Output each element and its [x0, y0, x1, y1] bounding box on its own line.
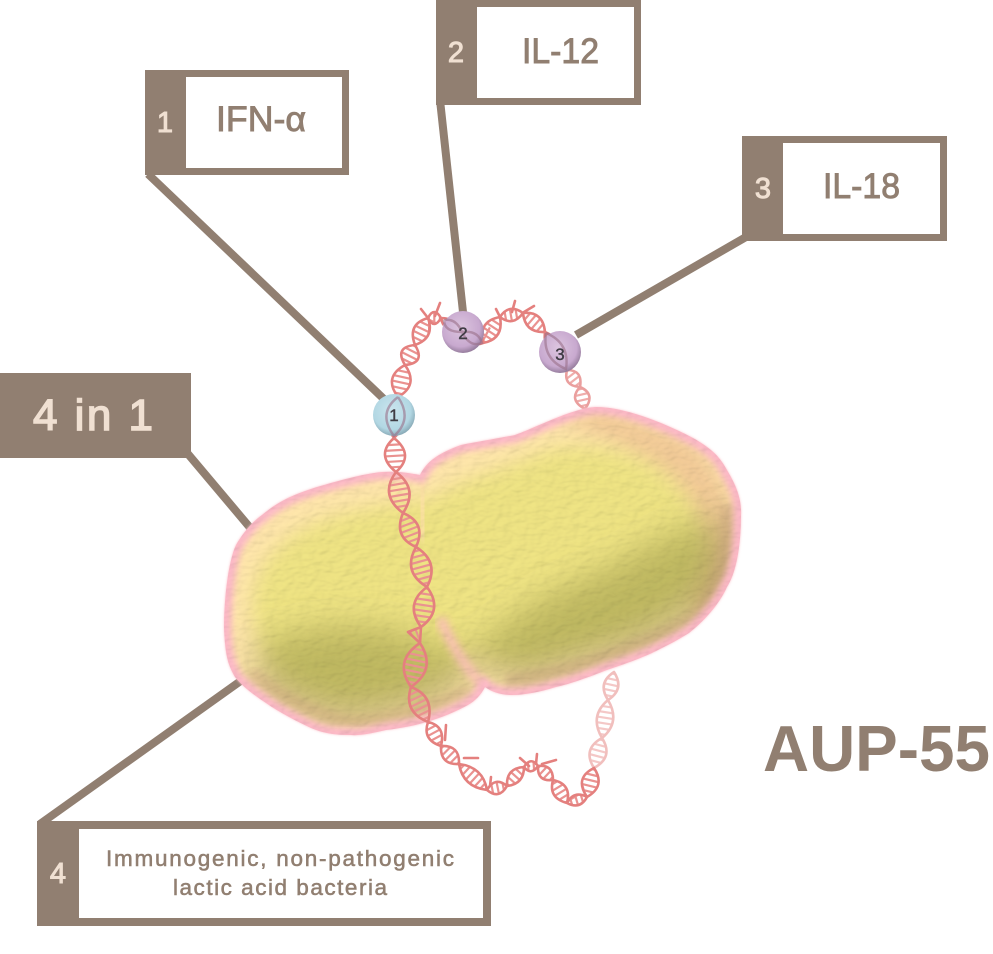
- label 2: IL-12: [436, 0, 641, 105]
- label 3: IL-18: [742, 136, 947, 241]
- sphere 2: [442, 311, 484, 353]
- label 4: bacteria description: Immunogenic, non-pathogenic: [106, 846, 454, 871]
- sphere 3: 3: [555, 345, 565, 364]
- label 1: IFN-α: 1: [157, 107, 173, 139]
- DNA strand: lower loop: [427, 722, 599, 805]
- connector: IL-12 to sphere 2: [440, 100, 463, 312]
- label: 4 in 1: 4 in 1: [33, 391, 153, 440]
- sphere 1: [373, 394, 415, 436]
- sphere 2: 2: [458, 324, 468, 343]
- connector: 4 in 1 to bacterium: [188, 454, 252, 530]
- connector: IL-18 to sphere 3: [576, 237, 746, 335]
- label: 4 in 1: [0, 373, 191, 458]
- DNA strand: over bacterium: [400, 513, 434, 722]
- connector: label 4 to bacterium: [40, 680, 242, 824]
- label 4: bacteria description: [37, 821, 491, 926]
- DNA strand: right loop, faded: [590, 672, 618, 768]
- sphere 1: 1: [389, 406, 399, 425]
- DNA strand behind bacterium: [566, 370, 589, 409]
- lactic acid bacterium: [215, 400, 750, 745]
- label 1: IFN-α: IFN-α: [216, 100, 306, 139]
- label 2: IL-12: 2: [448, 37, 464, 69]
- label 2: IL-12: IL-12: [522, 32, 599, 71]
- label 4: bacteria description: lactic acid bacteria: [173, 875, 387, 900]
- title: AUP-55: AUP-55: [763, 712, 990, 785]
- label 4: bacteria description: 4: [50, 858, 66, 890]
- label 3: IL-18: 3: [755, 173, 771, 205]
- sphere 3: [539, 331, 581, 373]
- label 1: IFN-α: [145, 70, 349, 175]
- label 3: IL-18: IL-18: [823, 167, 900, 206]
- connector: IFN-α to sphere 1: [148, 174, 386, 401]
- DNA strand: upper section: [385, 301, 567, 513]
